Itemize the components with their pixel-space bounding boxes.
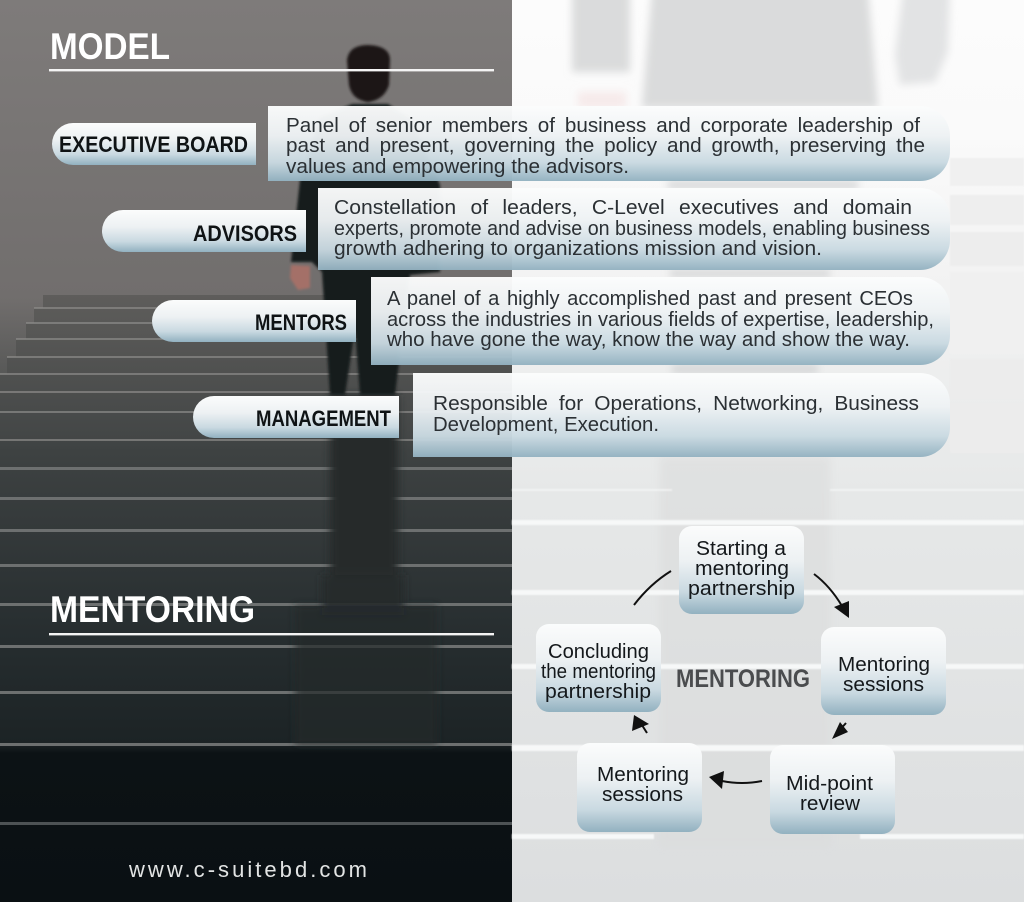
row: Management (193, 373, 950, 457)
faded figure (572, 0, 950, 847)
heading: MENTORING: MENTORING (50, 589, 255, 630)
label: MANAGEMENT (256, 406, 391, 431)
step: Mid-point review (770, 745, 895, 834)
upper stairs (0, 295, 512, 440)
step: Starting a mentoring partnership: mentoring (695, 558, 789, 580)
arrow: start to sessions (814, 574, 849, 618)
description panel (268, 106, 950, 181)
step: Mentoring sessions (left) (577, 743, 702, 832)
label pill (193, 396, 399, 438)
description text: who have gone the way, know the way and show the way. (386, 329, 910, 351)
left background photo (0, 0, 512, 902)
faded stairs (512, 158, 1024, 839)
cycle diagram: mentoring (536, 526, 946, 834)
step: Mentoring sessions (left): Mentoring (597, 764, 689, 786)
right background photo (512, 0, 1024, 902)
row: Mentors (152, 277, 950, 365)
description panel (371, 277, 950, 365)
row: Advisors (102, 188, 950, 270)
description text: values and empowering the advisors. (286, 156, 629, 178)
step: Mid-point review: Mid-point (786, 773, 873, 795)
heading: MODEL: MODEL (50, 26, 170, 67)
label pill (52, 123, 256, 165)
step: Starting a mentoring partnership: Starting a (696, 538, 787, 560)
step: Starting a mentoring partnership (679, 526, 804, 614)
description text: past and present, governing the policy and growth, preserving the (286, 135, 925, 157)
description text: A panel of a highly accomplished past and present CEOs (387, 288, 913, 310)
label pill (102, 210, 306, 252)
description text: across the industries in various fields of expertise, leadership, (387, 309, 934, 331)
description text: Responsible for Operations, Networking, Business (433, 393, 919, 415)
step: Starting a mentoring partnership: partnership (688, 578, 795, 600)
description text: Development, Execution. (433, 414, 659, 436)
arrow: concluding to start (634, 571, 671, 605)
step: Mentoring sessions (right): sessions (843, 674, 924, 696)
step: Concluding the mentoring partnership (536, 624, 661, 712)
label: EXECUTIVE BOARD (59, 132, 248, 157)
step: Concluding the mentoring partnership: the mentoring (541, 661, 656, 683)
description text: Panel of senior members of business and corporate leadership of (286, 115, 920, 137)
man's reflection (295, 395, 437, 745)
centre label: MENTORING (676, 665, 810, 693)
man standing (290, 45, 440, 395)
description panel (413, 373, 950, 457)
heading rule: MODEL (49, 69, 494, 71)
description text: experts, promote and advise on business models, enabling business (334, 218, 930, 240)
step: Mentoring sessions (left): sessions (602, 784, 683, 806)
row: Executive Board (52, 106, 950, 181)
step: Mentoring sessions (right) (821, 627, 946, 715)
label: MENTORS (255, 310, 347, 335)
arrow: sessions to mid-point (832, 722, 848, 739)
step: Mid-point review: review (800, 793, 861, 815)
website address: www.c-suitebd.com (128, 857, 367, 882)
step: Concluding the mentoring partnership: Concluding (548, 641, 649, 663)
step: Mentoring sessions (right): Mentoring (838, 654, 930, 676)
description panel (318, 188, 950, 270)
label: ADVISORS (193, 221, 297, 246)
arrow: sessions to concluding (632, 715, 649, 733)
heading rule: MENTORING (49, 633, 494, 635)
lower stairs (0, 467, 512, 825)
label pill (152, 300, 356, 342)
description text: growth adhering to organizations mission and vision. (334, 238, 822, 260)
step: Concluding the mentoring partnership: partnership (545, 681, 651, 703)
arrow: mid-point to sessions (709, 771, 762, 789)
description text: Constellation of leaders, C-Level executives and domain (334, 197, 912, 219)
